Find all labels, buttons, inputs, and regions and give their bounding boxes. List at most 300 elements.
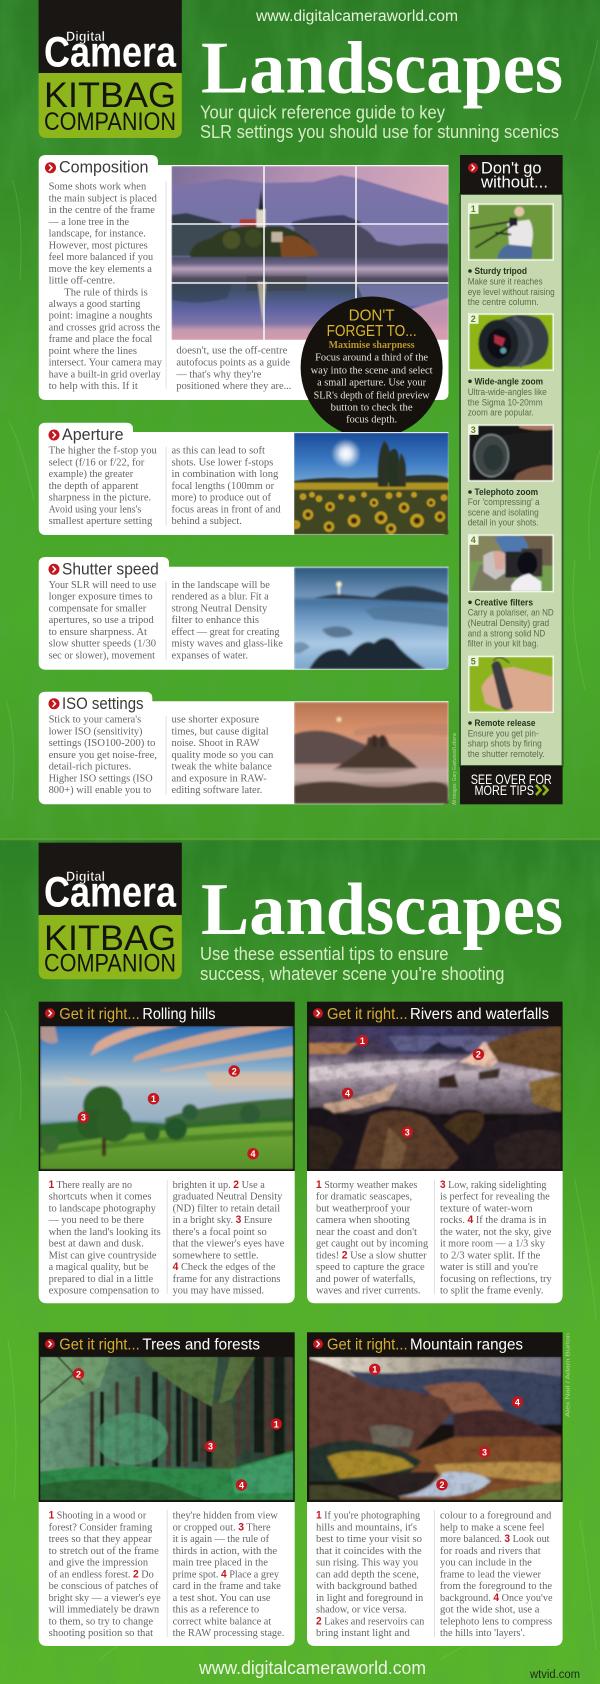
text: ISO column 1: 800+) will enable you to (49, 784, 151, 796)
callout: don't forget to: a small aperture. Use your (317, 377, 426, 389)
item 2: wide-angle zoom: Ultra-wide-angles like (468, 387, 547, 397)
text: mountains column 2: background. 4 Once you've (440, 1592, 553, 1604)
text: trees column 2: thirds in action, with the (173, 1545, 277, 1557)
text: rivers column 1: camera when shooting (316, 1214, 410, 1226)
text: rivers column 1 (316, 1179, 429, 1297)
text: ISO column 2 (172, 714, 274, 796)
heading: Get it right... (59, 1337, 140, 1354)
text: rivers column 2: the water, not the sky, give (440, 1226, 552, 1238)
item 4: creative filters: Creative filters (474, 597, 533, 607)
subtitle (top): SLR settings you should use for stunning scenics (200, 122, 559, 142)
text: shutter speed column 1: Your SLR will need to use (49, 579, 156, 591)
column divider (433, 1510, 436, 1637)
text: aperture column 2: as this can lead to soft (172, 445, 265, 457)
heading: Get it right... (327, 1337, 408, 1354)
text: rolling hills column 1: — you need to be there (48, 1214, 144, 1226)
text: mountains column 1: 1 If you're photographing (316, 1510, 421, 1522)
text: trees column 2: they're hidden from view (173, 1510, 278, 1522)
text: mountains column 2: you can include in the (440, 1557, 532, 1569)
text: rolling hills column 2: 4 Check the edges of the (173, 1261, 276, 1273)
text: aperture column 2: shots. Use lower f-stops (172, 456, 273, 468)
heading: shutter speed: Shutter speed (62, 560, 159, 578)
text: composition column 1: Some shots work when (49, 181, 147, 193)
marker 3 (402, 1126, 413, 1138)
callout: don't forget to: Maximise sharpness (329, 339, 415, 351)
marker 3 (205, 1441, 216, 1452)
text: composition column 2: — that's why they're (175, 368, 262, 380)
callout: don't forget to: way into the scene and select (311, 364, 433, 376)
item 1: sturdy tripod (468, 203, 555, 307)
text: aperture column 2: focal lengths (100mm or (172, 480, 274, 492)
text: mountains column 1: bring instant light and (316, 1627, 410, 1639)
text: composition column 2: doesn't, use the off-centre (176, 345, 288, 357)
text: ISO column 2: quality mode so you can (172, 749, 274, 761)
marker 1 (271, 1418, 282, 1430)
item 1: sturdy tripod: 1 (471, 204, 476, 214)
item 4: creative filters: filter in your kit bag. (468, 639, 539, 649)
item 5: remote release: Remote release (474, 718, 536, 728)
text: aperture column 2: focus areas in front of and (172, 503, 281, 515)
heading: ISO settings: ISO settings (62, 695, 144, 713)
heading: Mountain ranges (410, 1337, 523, 1354)
text: rolling hills column 2: that the viewer's eyes have (173, 1238, 285, 1250)
item 5: remote release: 5 (471, 656, 476, 666)
text: aperture column 1: The higher the f-stop you (49, 445, 157, 457)
heading: Get it right... (59, 1006, 140, 1023)
text: trees column 1: to them, so try to change (49, 1615, 153, 1627)
text: ISO column 1: ensure you get noise-free, (49, 749, 157, 761)
text: composition column 1: However, most pictures (49, 239, 148, 251)
text: trees column 2: correct white balance at (173, 1615, 271, 1627)
marker 1 (148, 1093, 159, 1104)
marker 3: 3 (208, 1442, 213, 1452)
callout: don't forget to: Focus around a third of the (315, 352, 428, 364)
text: composition column 1: have a built-in grid overlay (49, 368, 161, 380)
text: trees column 1: of an endless forest. 2 Do (49, 1568, 154, 1580)
text: rivers column 2: texture of water-worn (440, 1202, 533, 1214)
text: aperture column 1: Avoid using your lens's (49, 503, 141, 515)
text: shutter speed column 2: effect — great for creating (172, 626, 280, 638)
text: ISO column 2: and exposure in RAW- (172, 772, 267, 784)
text: composition column 1: move the key elements a (49, 263, 152, 275)
text: aperture column 2: behind a subject. (172, 515, 242, 527)
text: ISO column 2: noise. Shoot in RAW (172, 737, 260, 749)
text: composition column 1: landscape, for instance. (49, 228, 146, 240)
text: composition column 1: and crosses grid across the (49, 322, 160, 334)
text: shutter speed column 1 (49, 579, 156, 661)
heading: Rolling hills (142, 1006, 216, 1023)
text: mountains column 1 (316, 1510, 425, 1639)
text: ISO column 1 (49, 714, 157, 796)
item 2: wide-angle zoom: Wide-angle zoom (474, 376, 543, 386)
item 5: remote release (468, 656, 554, 759)
website url (top): www.digitalcameraworld.com (255, 8, 458, 25)
logo: Digital Camera Kitbag Companion (top): Camera (44, 28, 177, 76)
text: aperture column 1: smallest aperture setting (49, 515, 153, 527)
callout: don't forget to: DON'T (349, 308, 395, 325)
text: rivers column 2: to 2/3 water split. If the (440, 1249, 540, 1261)
text: composition column 2: autofocus points as a guide (176, 357, 290, 369)
text: trees column 2: this as a reference to (173, 1604, 259, 1616)
text: composition column 1: always a good starting (49, 298, 141, 310)
text: mountains column 2: from the foreground to the (440, 1580, 552, 1592)
item 2: wide-angle zoom (468, 313, 554, 418)
marker 4: 4 (250, 1149, 256, 1159)
text: trees column 2 (173, 1510, 284, 1639)
text: trees column 1: forest? Consider framing (49, 1521, 153, 1533)
text: shutter speed column 1: slow shutter speeds (1/30 (49, 638, 156, 650)
item 3: telephoto zoom: scene and isolating (468, 507, 539, 517)
text: rolling hills column 1 (48, 1179, 161, 1297)
sidebar footer: see over for more tips: SEE OVER FOR (471, 771, 552, 787)
item 5: remote release: the shutter remotely. (468, 749, 545, 759)
marker 1: 1 (274, 1419, 279, 1429)
text: rivers column 1: tides! 2 Use a slow shutter (316, 1249, 427, 1261)
text: rolling hills column 2: you may have missed. (173, 1285, 264, 1297)
marker 1: 1 (151, 1094, 156, 1104)
panel: trees and forests (39, 1332, 295, 1646)
heading: aperture: Aperture (62, 426, 124, 444)
item 4: creative filters: 4 (471, 535, 476, 545)
text: trees column 2: a test shot. You can use (173, 1592, 271, 1604)
text: rivers column 1: and power of waterfalls, (316, 1273, 416, 1285)
column divider (165, 447, 168, 526)
text: mountains column 1: best to time your visit so (316, 1533, 422, 1545)
text: rivers column 1: 1 Stormy weather makes (316, 1179, 417, 1191)
heading: Get it right... (327, 1006, 408, 1023)
text: mountains column 2 (440, 1510, 553, 1639)
text: shutter speed column 2: misty waves and glass-like (172, 638, 283, 650)
item 3: telephoto zoom: For 'compressing' a (468, 497, 540, 507)
text: composition column 1: point where the lines (49, 345, 137, 357)
watermark: wtvid.com (529, 1669, 580, 1681)
item 5: remote release: Ensure you get pin- (468, 728, 539, 738)
marker 4 (512, 1396, 523, 1408)
title: Landscapes (top): Landscapes (201, 28, 563, 110)
text: trees column 1: shooting position so that (49, 1627, 153, 1639)
heading (45, 1006, 216, 1023)
marker 4: 4 (515, 1397, 520, 1407)
marker 4 (342, 1088, 353, 1099)
heading (313, 1337, 523, 1354)
logo: Digital Camera Kitbag Companion (top): COMPANION (44, 108, 176, 136)
callout: don't forget to: button to check the (331, 402, 413, 414)
item 2: wide-angle zoom: zoom are popular. (468, 408, 534, 418)
item 4: creative filters (468, 534, 554, 649)
column divider (433, 1180, 436, 1294)
panel: ISO settings (39, 692, 448, 804)
text: rivers column 2: focusing on reflections, try (440, 1273, 552, 1285)
logo: Digital Camera Kitbag Companion (bottom): KITBAG (44, 919, 176, 958)
text: rolling hills column 1: exposure compensation to (49, 1285, 159, 1297)
text: mountains column 2: frame to lead the viewer (440, 1568, 541, 1580)
text: ISO column 1: detail-rich pictures. (49, 761, 131, 773)
item 3: telephoto zoom: detail in your shots. (468, 518, 539, 528)
text: rolling hills column 1: 1 There really are no (49, 1179, 132, 1191)
text: rolling hills column 1: best at dawn and dusk. (49, 1238, 144, 1250)
text: mountains column 2: got the wide shot, use a (440, 1604, 540, 1616)
text: ISO column 2: tweak the white balance (172, 761, 272, 773)
marker 2: 2 (76, 1369, 81, 1379)
photo: misty seascape with lighthouse (294, 567, 448, 670)
text: composition column 1: intersect. Your camera may (49, 357, 162, 369)
text: rolling hills column 2: brighten it up. 2 Use a (173, 1179, 265, 1191)
text: rivers column 2 (440, 1179, 552, 1297)
text: aperture column 1: sharpness in the picture. (49, 492, 151, 504)
text: ISO column 2: times, but cause digital (172, 725, 269, 737)
text: mountains column 1: sun rising. This way you (316, 1557, 419, 1569)
text: rivers column 1: near the coast and don't (316, 1226, 417, 1238)
text: aperture column 2: in combination with long (172, 468, 279, 480)
text: composition column 1: to help with this. If it (49, 380, 138, 392)
sidebar heading: without... (480, 173, 548, 191)
text: mountains column 2: help to make a scene feel (440, 1521, 545, 1533)
panel: mountain ranges (307, 1332, 563, 1646)
text: trees column 2: it is again — the rule of (173, 1533, 269, 1545)
text: rolling hills column 2: there's a focal point so (173, 1226, 267, 1238)
text: mountains column 1: in light and foreground in (316, 1592, 424, 1604)
panel: rolling hills (39, 1002, 295, 1303)
text: mountains column 2: the hills into 'layers'. (440, 1627, 525, 1639)
text: trees column 2: main tree placed in the (173, 1557, 268, 1569)
text: rolling hills column 2: frame for any distractions (173, 1273, 280, 1285)
text: shutter speed column 1: to ensure sharpness. At (49, 626, 147, 638)
text: mountains column 1: hills and mountains, it's (316, 1521, 417, 1533)
marker 2: 2 (439, 1480, 445, 1490)
text: rolling hills column 2: graduated Neutral Density (173, 1191, 283, 1203)
heading (45, 1337, 260, 1354)
column divider (165, 581, 168, 660)
photo: tree and misty hills (40, 1026, 294, 1170)
text: rolling hills column 1: prepared to dial in a little (49, 1273, 153, 1285)
text: mountains column 2: colour to a foreground and (440, 1510, 552, 1522)
marker 3: 3 (405, 1127, 410, 1137)
marker 4: 4 (239, 1480, 244, 1490)
text: trees column 1: will immediately be drawn (49, 1604, 160, 1616)
subtitle (top) (200, 103, 559, 142)
heading (313, 1006, 549, 1023)
photo: sunflower field (294, 432, 448, 535)
text: composition column 1: in the centre of the frame (49, 204, 155, 216)
photo credit (top): All images: Gary Eastwood/Lebens (452, 733, 458, 805)
text: rolling hills column 1: Mist can give countryside (49, 1249, 157, 1261)
text: rivers column 2: to split the frame evenly. (440, 1285, 543, 1297)
text: mountains column 1: with background bathed (316, 1580, 418, 1592)
logo: Digital Camera Kitbag Companion (bottom): COMPANION (44, 950, 176, 978)
text: rolling hills column 1: to landscape photography (49, 1202, 156, 1214)
marker 4 (247, 1148, 259, 1159)
text: rivers column 1: waves and river currents. (316, 1285, 420, 1297)
logo: Digital Camera Kitbag Companion (bottom) (39, 843, 182, 979)
marker 1 (357, 1035, 368, 1046)
text: trees column 1: 1 Shooting in a wood or (49, 1510, 147, 1522)
text: rolling hills column 2: (ND) filter to retain detail (173, 1202, 280, 1214)
text: composition column 1 (48, 181, 162, 392)
item 1: sturdy tripod: the centre column. (468, 297, 539, 307)
text: aperture column 1: example) the greater (49, 468, 134, 480)
panel: aperture (39, 423, 448, 535)
photo: lake Bled with rule-of-thirds grid (172, 166, 448, 340)
text: trees column 1: be conscious of patches of (49, 1580, 159, 1592)
text: aperture column 1 (49, 445, 157, 527)
text: rivers column 2: is perfect for revealing the (440, 1191, 550, 1203)
marker 4 (236, 1479, 247, 1491)
subtitle (bottom) (200, 944, 504, 984)
marker 2: 2 (232, 1066, 237, 1076)
text: aperture column 1: select (f/16 or f/22, for (49, 456, 145, 468)
text: rivers column 1: for dramatic seascapes, (316, 1191, 412, 1203)
callout: don't forget to: SLR's depth of field preview (314, 389, 430, 401)
text: rivers column 1: speed to capture the grace (316, 1261, 425, 1273)
marker 2 (228, 1065, 240, 1077)
sidebar footer: see over for more tips (460, 766, 563, 804)
logo: Digital Camera Kitbag Companion (bottom): Digital (66, 869, 105, 884)
marker 2: 2 (476, 1050, 481, 1060)
text: trees column 1: to stretch out of the frame (49, 1545, 159, 1557)
text: mountains column 2: for roads and rivers that (440, 1545, 541, 1557)
item 1: sturdy tripod: Sturdy tripod (474, 266, 527, 276)
text: rivers column 1: but weatherproof your (316, 1202, 410, 1214)
text: shutter speed column 2: strong Neutral Density (172, 602, 268, 614)
logo: Digital Camera Kitbag Companion (top) (39, 0, 182, 138)
text: rolling hills column 1: shortcuts when it comes (49, 1191, 152, 1203)
marker 3: 3 (81, 1113, 86, 1123)
item 1: sturdy tripod: Make sure it reaches (468, 276, 543, 286)
item 3: telephoto zoom (468, 424, 554, 528)
logo: Digital Camera Kitbag Companion (top): KITBAG (44, 76, 176, 115)
marker 1 (369, 1364, 380, 1375)
text: trees column 2: or cropped out. 3 There (173, 1521, 271, 1533)
item 4: creative filters: Carry a polariser, an ND (468, 608, 554, 618)
text: aperture column 2: more) to produce out of (172, 492, 271, 504)
callout: don't forget to (301, 296, 443, 438)
item 3: telephoto zoom: 3 (471, 425, 476, 435)
item 4: creative filters: and a strong solid ND (468, 628, 546, 638)
text: shutter speed column 1: apertures, so use a tripod (49, 614, 154, 626)
column divider (165, 716, 168, 795)
marker 1: 1 (360, 1036, 365, 1046)
item 3: telephoto zoom: Telephoto zoom (474, 487, 538, 497)
text: ISO column 2: editing software later. (172, 784, 262, 796)
text: shutter speed column 1: sec or slower), movement (49, 649, 155, 661)
text: trees column 2: card in the frame and take (173, 1580, 281, 1592)
text: rolling hills column 1: a magical quality, but be (49, 1261, 149, 1273)
website url (bottom): www.digitalcameraworld.com (198, 1658, 426, 1678)
text: mountains column 2: telephoto lens to compress (440, 1615, 552, 1627)
text: mountains column 2: more balanced. 3 Look out (440, 1533, 550, 1545)
subtitle (top): Your quick reference guide to key (200, 103, 445, 123)
sidebar heading: Don't go (481, 159, 542, 177)
sidebar heading (460, 155, 563, 194)
column divider (166, 1510, 169, 1637)
text: composition column 1: feel more balanced if you (49, 251, 154, 263)
marker 2 (473, 1049, 484, 1060)
text: shutter speed column 2: filter to enhance this (172, 614, 259, 626)
text: rolling hills column 2 (173, 1179, 285, 1297)
column divider (166, 1180, 169, 1294)
sidebar footer: see over for more tips: MORE TIPS (474, 782, 534, 798)
photo credit (bottom): Alex Nail / Adam Burton (566, 1333, 572, 1417)
photo: stormy coast (308, 1026, 562, 1170)
text: mountains column 1: 2 Lakes and reservoirs can (316, 1615, 425, 1627)
marker 1: 1 (372, 1365, 377, 1375)
text: composition column 1: frame and place the focal (49, 333, 152, 345)
logo: Digital Camera Kitbag Companion (top): Digital (66, 29, 105, 44)
photo: mountains and lake (309, 1356, 562, 1500)
title: Landscapes (bottom): Landscapes (201, 869, 563, 951)
marker 3 (78, 1112, 89, 1123)
heading: Trees and forests (142, 1337, 260, 1354)
text: shutter speed column 2: expanses of water. (172, 649, 248, 661)
item 5: remote release: sharp shots by firing (468, 739, 542, 749)
column divider (165, 182, 168, 389)
text: rolling hills column 2: in a bright sky. 3 Ensure (173, 1214, 272, 1226)
item 4: creative filters: (Neutral Density) grad (468, 618, 549, 628)
marker 3 (479, 1446, 490, 1458)
text: ISO column 1: settings (ISO100-200) to (49, 737, 155, 749)
text: composition column 1: the main subject is placed (49, 192, 157, 204)
text: composition column 2 (175, 345, 291, 392)
text: rivers column 2: 3 Low, raking sidelighting (440, 1179, 547, 1191)
text: shutter speed column 2: in the landscape will be (172, 579, 270, 591)
text: composition column 1: — a lone tree in the (48, 216, 129, 228)
text: shutter speed column 2 (172, 579, 283, 661)
text: rivers column 2: it more room — a 1/3 sky (440, 1238, 545, 1250)
item 2: wide-angle zoom: the Sigma 10-20mm (468, 397, 543, 407)
heading: Rivers and waterfalls (410, 1006, 549, 1023)
panel: composition (39, 155, 448, 400)
text: rivers column 2: rocks. 4 If the drama is in (440, 1214, 547, 1226)
text: composition column 1: little off-centre. (49, 274, 115, 286)
text: aperture column 1: the depth of apparent (49, 480, 138, 492)
text: composition column 1: point: imagine a noughts (49, 310, 152, 322)
logo: Digital Camera Kitbag Companion (bottom): Camera (44, 869, 177, 917)
text: trees column 1: bright sky — a viewer's eye (49, 1592, 161, 1604)
subtitle (bottom): Use these essential tips to ensure (200, 944, 448, 964)
text: rivers column 1: get caught out by incoming (316, 1238, 429, 1250)
text: rivers column 2: water is still and you're (440, 1261, 538, 1273)
callout: don't forget to: FORGET TO... (327, 323, 417, 340)
text: shutter speed column 1: compensate for smaller (49, 602, 147, 614)
callout: don't forget to: focus depth. (346, 414, 397, 426)
text: trees column 1 (49, 1510, 161, 1639)
text: mountains column 1: can add depth the scene, (316, 1568, 419, 1580)
text: trees column 1: trees so that they appear (49, 1533, 152, 1545)
text: shutter speed column 1: longer exposure times to (49, 591, 153, 603)
panel: shutter speed (39, 557, 448, 670)
text: shutter speed column 2: rendered as a blur. Fit a (172, 591, 269, 603)
photo: forest (40, 1356, 294, 1500)
text: trees column 2: the RAW processing stage. (173, 1627, 284, 1639)
text: rolling hills column 1: when the land's looking its (49, 1226, 161, 1238)
text: ISO column 2: use shorter exposure (172, 714, 259, 726)
text: ISO column 1: Stick to your camera's (49, 714, 141, 726)
text: composition column 1: The rule of thirds is (64, 286, 148, 298)
text: rolling hills column 2: somewhere to settle. (173, 1249, 259, 1261)
item 2: wide-angle zoom: 2 (471, 314, 476, 324)
subtitle (bottom): success, whatever scene you're shooting (200, 964, 504, 984)
marker 2 (73, 1368, 84, 1380)
text: ISO column 1: Higher ISO settings (ISO (49, 772, 153, 784)
text: mountains column 1: shadow, or vice versa. (316, 1604, 407, 1616)
marker 2 (436, 1479, 448, 1490)
panel: don't go without sidebar (460, 155, 563, 804)
heading: composition: Composition (59, 159, 148, 177)
item 1: sturdy tripod: eye level without raising (468, 287, 555, 297)
text: trees column 1: and give the impression (49, 1557, 149, 1569)
text: composition column 2: positioned where they are... (176, 380, 291, 392)
marker 4: 4 (345, 1089, 350, 1099)
